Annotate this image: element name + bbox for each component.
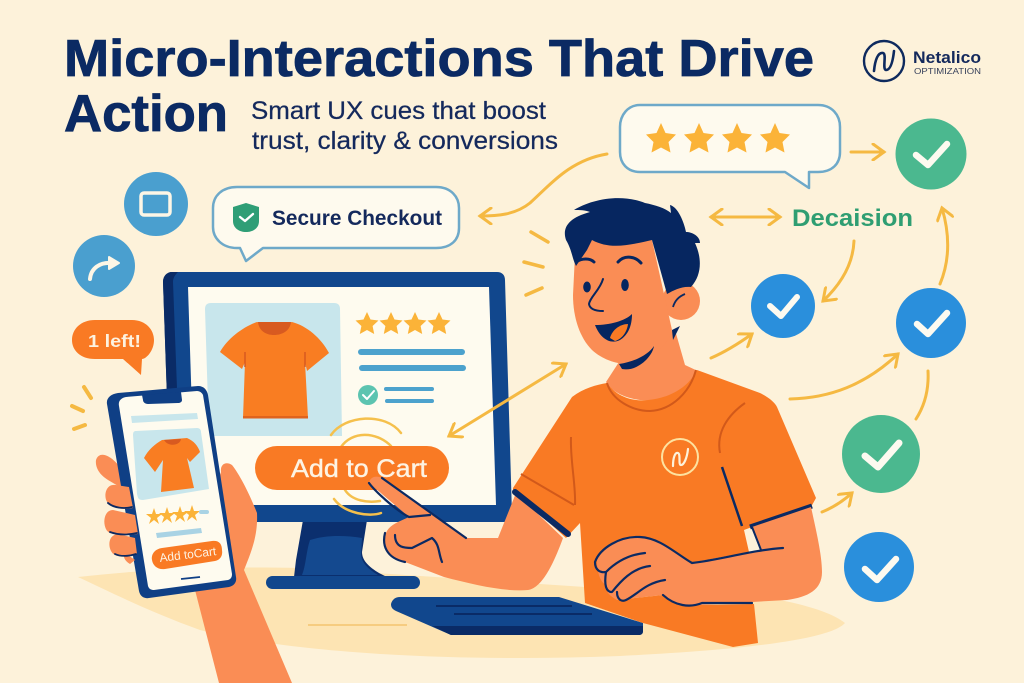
arrow: to green lower: [822, 493, 852, 512]
callout: 1 left: [72, 320, 154, 375]
title: [64, 30, 814, 143]
icon: share arrow: [73, 235, 135, 297]
check circle: blue right: [896, 288, 966, 358]
product image panel: [205, 303, 342, 436]
ear detail: [673, 294, 685, 307]
nose: [589, 279, 603, 311]
sparkle lines near face: [524, 232, 548, 295]
arrow: screen to person double: [449, 364, 566, 436]
phone hand back finger: [96, 455, 125, 490]
check circle: top green: [896, 118, 966, 190]
left arm and pointing hand: [369, 477, 568, 590]
head: [565, 198, 700, 369]
callout: 1 left: 1 left!: [88, 331, 141, 351]
icon: window: [124, 172, 188, 236]
shirt logo: [662, 439, 698, 475]
forearm holding phone: [195, 463, 292, 683]
table surface: [78, 567, 845, 658]
phone button: Add toCart: [159, 544, 218, 565]
phone: [107, 386, 236, 598]
phone stars: [146, 505, 200, 524]
arrow: rating to green check: [851, 150, 884, 154]
arrow: double: [711, 216, 780, 218]
mouth: [595, 314, 632, 342]
arrow: to blue middle: [711, 334, 752, 358]
title: Action: [64, 85, 228, 143]
ripple arcs behind button: [331, 419, 401, 515]
monitor stand: [266, 520, 420, 589]
button: add to cart: Add to Cart: [291, 455, 427, 483]
callout: secure checkout: Secure Checkout: [272, 207, 442, 230]
neck: [606, 330, 700, 400]
arrow: up to green: [940, 208, 948, 284]
hair: [565, 198, 700, 294]
arrow: green to blue right: [916, 371, 928, 419]
subtitle: trust, clarity & conversions: [252, 127, 558, 155]
eyes: [583, 282, 591, 292]
brows: [576, 257, 641, 263]
t-shirt: [513, 370, 816, 647]
check circle: blue lower: [844, 532, 914, 602]
arrow: decision to blue check: [823, 241, 854, 301]
title: Micro-Interactions That Drive: [64, 30, 814, 88]
star rating: [356, 312, 450, 334]
logo: Netalico Optimization: [864, 41, 981, 81]
subtitle: [251, 97, 558, 155]
check circle: blue middle: [751, 274, 815, 338]
label: decision: Decaision: [792, 205, 913, 232]
keyboard: [391, 597, 643, 635]
phone hand front fingers: [104, 485, 138, 564]
icon: shield: [233, 203, 259, 232]
beard shadow: [619, 346, 654, 369]
decorative table line: [308, 624, 407, 626]
monitor: [163, 272, 512, 522]
logo: Netalico Optimization: OPTIMIZATION: [914, 66, 981, 76]
person: [369, 198, 822, 647]
arrow: rating to secure checkout: [480, 154, 607, 216]
logo: Netalico Optimization: Netalico: [913, 49, 981, 67]
check circle: green lower: [842, 415, 920, 493]
callout: secure checkout: [213, 187, 459, 261]
sparkle lines near phone: [72, 387, 91, 429]
phone button: [152, 541, 222, 569]
arrow: to blue right: [790, 354, 898, 399]
callout: star rating: [620, 105, 840, 188]
subtitle: Smart UX cues that boost: [251, 97, 546, 125]
icon: small check: [358, 385, 378, 405]
button: add to cart: [255, 446, 449, 490]
right arm and hand: [595, 507, 822, 606]
stars: [646, 123, 790, 152]
text lines: [358, 349, 466, 403]
icon: phone t-shirt: [144, 438, 200, 492]
icon: t-shirt: [220, 322, 329, 418]
